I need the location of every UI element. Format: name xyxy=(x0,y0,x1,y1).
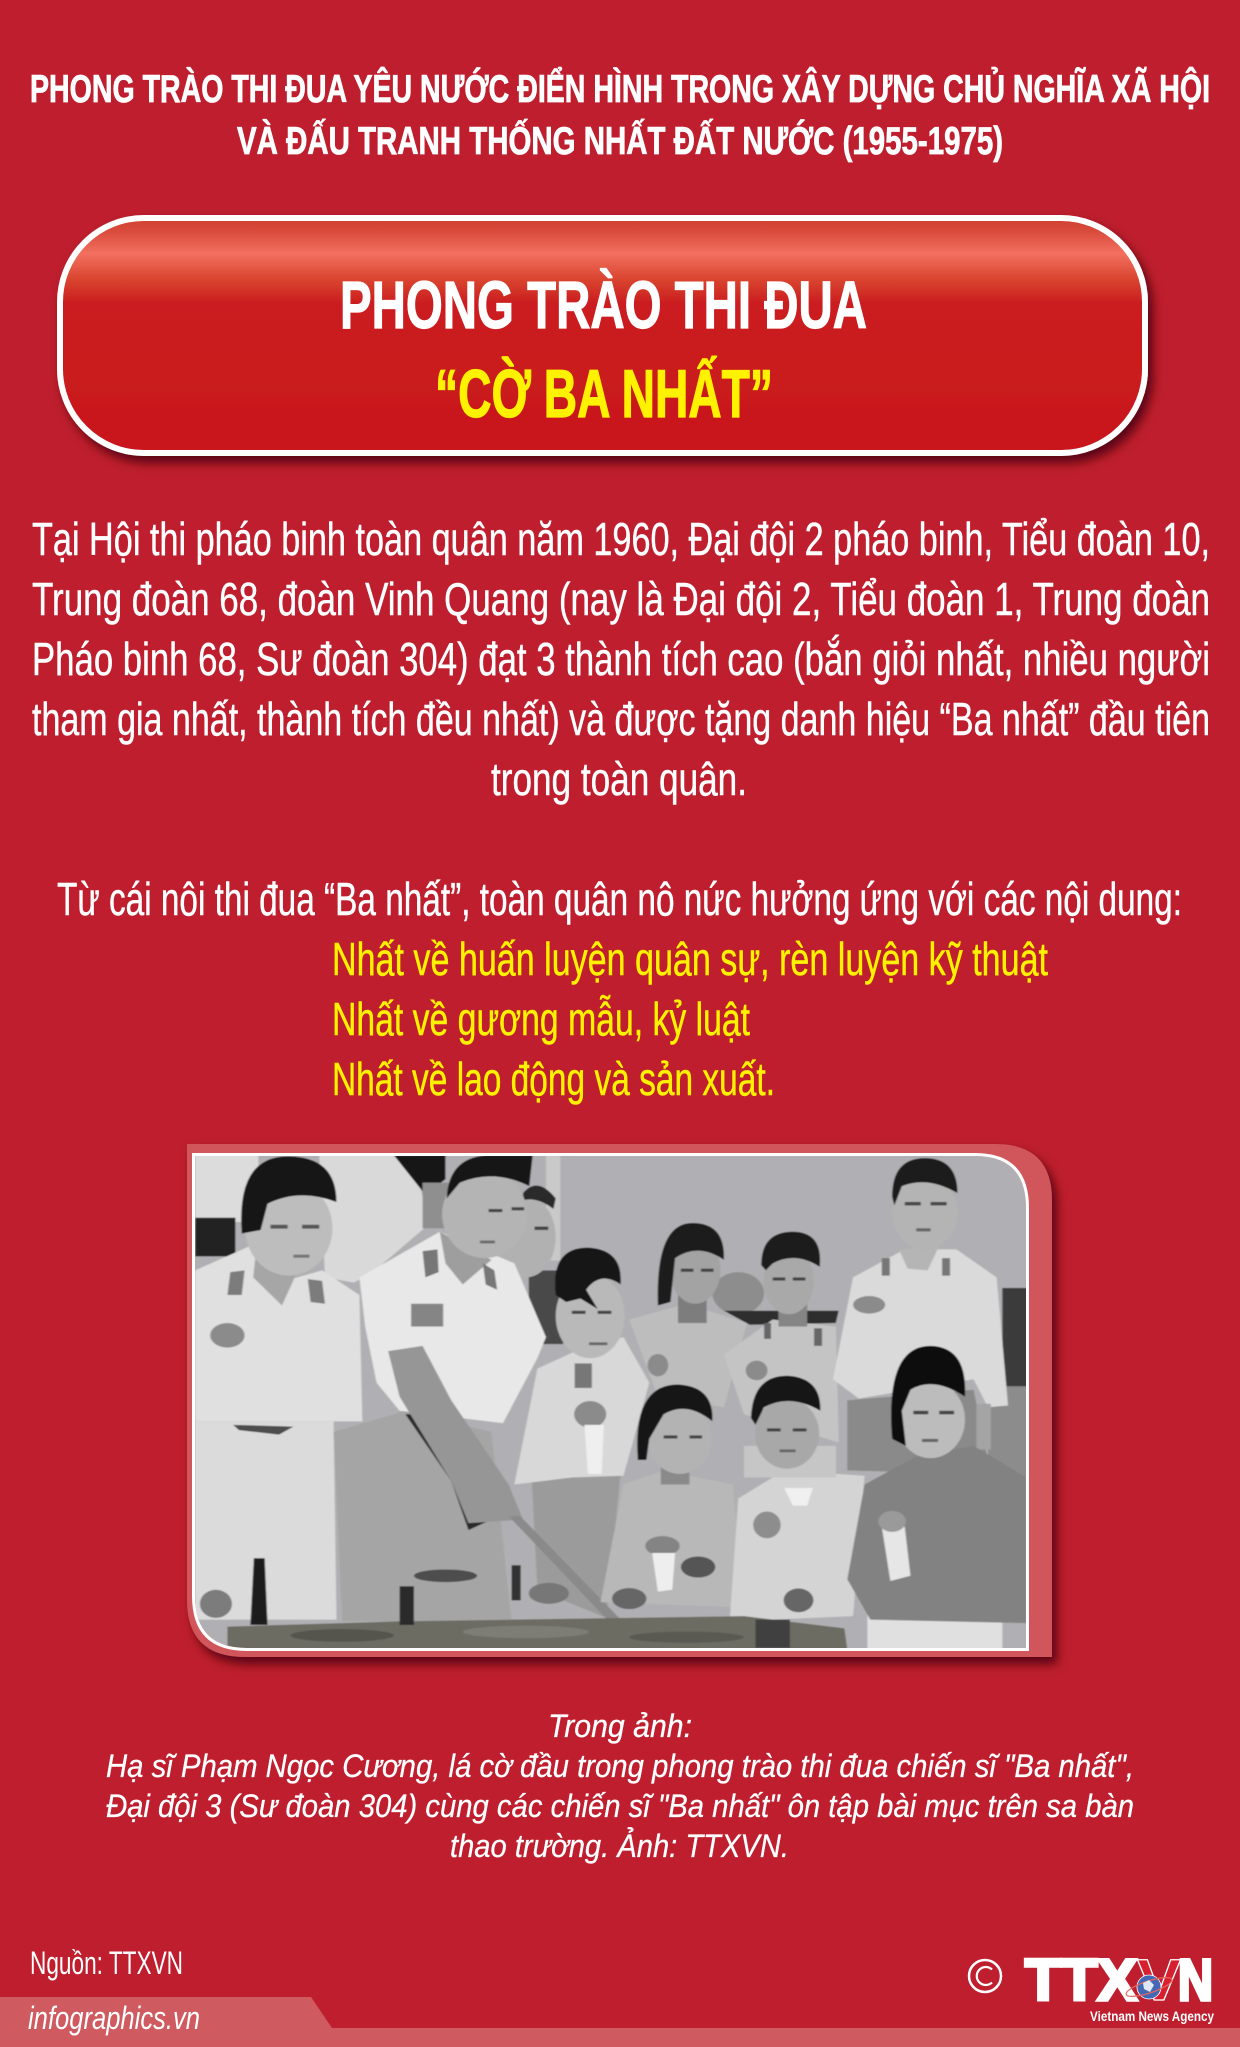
icon: copyright xyxy=(969,1960,1001,1992)
icon: globe with orbit xyxy=(1124,1974,1174,2000)
front soldier C xyxy=(867,1614,1002,1649)
panel: photo frame xyxy=(187,1144,1052,1657)
back soldier 5 xyxy=(724,1320,839,1442)
panel: heading button xyxy=(60,218,1145,453)
back soldier 4 xyxy=(629,1304,747,1407)
logo: TTXVN: V xyxy=(1137,1948,1181,2013)
footer band xyxy=(0,1997,1240,2047)
heading: cờ ba nhất: “CỜ BA NHẤT” xyxy=(435,355,773,432)
logo: TTXVN xyxy=(969,1948,1214,2024)
title xyxy=(30,66,1210,163)
logo: TTXVN: Vietnam News Agency xyxy=(1090,2008,1214,2024)
left soldier 1 xyxy=(195,1246,362,1421)
text block: photo caption: Trong ảnh: xyxy=(548,1708,692,1744)
website label: infographics.vn xyxy=(28,2000,200,2036)
text block: yellow list: Nhất về lao động và sản xuất. xyxy=(332,1053,775,1105)
wall and background xyxy=(187,1151,1037,1653)
text block: yellow list xyxy=(332,933,1048,1105)
pointing soldier 2 xyxy=(334,1411,512,1621)
sand table xyxy=(227,1616,847,1649)
title: VÀ ĐẤU TRANH THỐNG NHẤT ĐẤT NƯỚC (1955-1975) xyxy=(237,118,1003,163)
text block: photo caption: Hạ sĩ Phạm Ngọc Cương, lá cờ đầu trong phong trào thi đua chiến sĩ "Ba nhất", xyxy=(106,1748,1134,1784)
text block: intro paragraph: trong toàn quân. xyxy=(491,753,747,805)
back soldier 6 xyxy=(847,1390,991,1474)
person behind xyxy=(529,1270,563,1344)
logo: TTXVN: TTX xyxy=(1025,1948,1137,2013)
text block: intro paragraph xyxy=(32,513,1210,805)
source note: Nguồn: TTXVN xyxy=(30,1945,183,1981)
logo: TTXVN: N xyxy=(1178,1948,1213,2013)
front soldier B xyxy=(730,1470,865,1621)
middle soldier 3 xyxy=(532,1474,621,1618)
photo: soldiers around sand table xyxy=(187,1151,1037,1653)
text block: photo caption: thao trường. Ảnh: TTXVN. xyxy=(450,1828,789,1864)
text block: photo caption: Đại đội 3 (Sư đoàn 304) cùng các chiến sĩ "Ba nhất" ôn tập bài mục trên sa bàn xyxy=(106,1788,1134,1824)
text block: photo caption xyxy=(106,1708,1134,1864)
heading: phong trào thi đua: PHONG TRÀO THI ĐUA xyxy=(340,268,867,343)
text block: yellow list: Nhất về gương mẫu, kỷ luật xyxy=(332,993,750,1045)
front soldier A xyxy=(600,1527,616,1603)
